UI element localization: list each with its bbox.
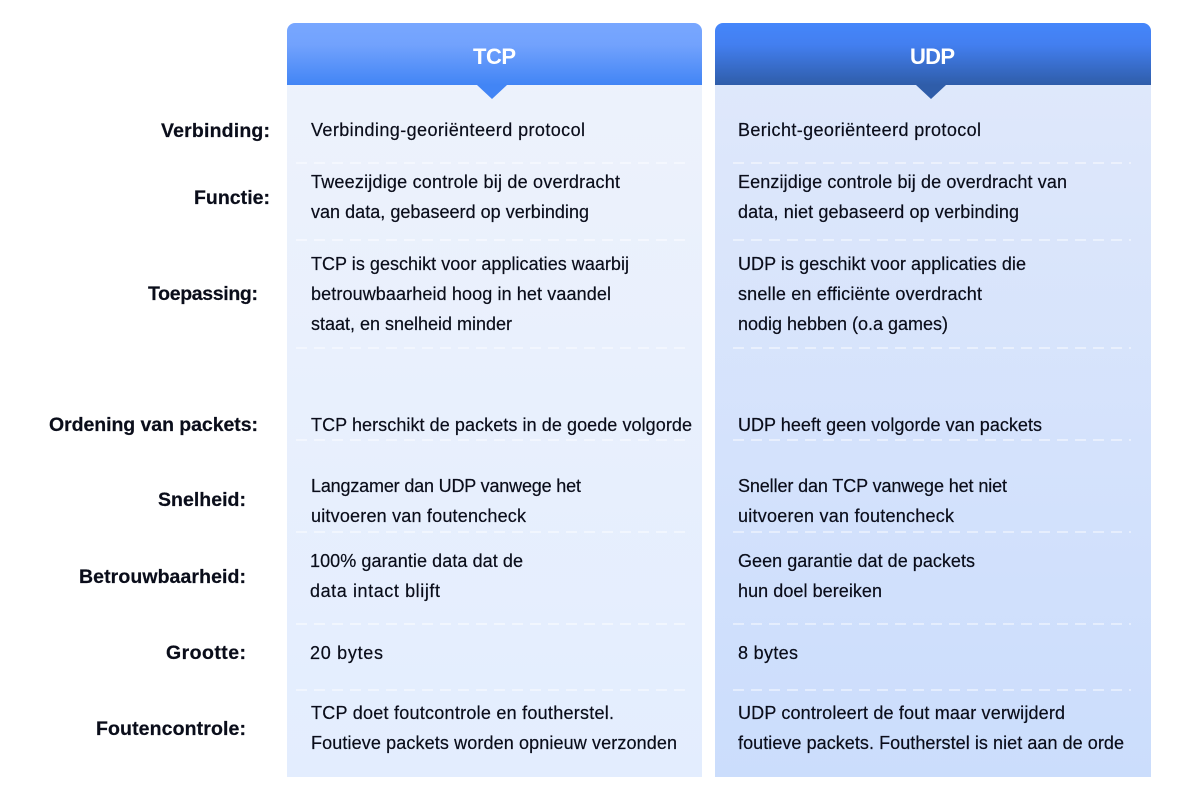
TCP cell: Betrouwbaarheid: data intact blijft [310,581,440,601]
UDP cell: Toepassing: snelle en efficiënte overdracht [738,284,982,304]
UDP cell: Foutencontrole [738,703,1124,753]
TCP cell: Functie: Tweezijdige controle bij de overdracht [311,172,620,192]
TCP cell: Foutencontrole: Foutieve packets worden opnieuw verzonden [311,733,677,753]
label: Snelheid: Snelheid: [158,489,246,511]
row labels [49,120,270,740]
UDP cell: Toepassing: UDP is geschikt voor applicaties die [738,254,1026,274]
UDP header band [715,23,1151,85]
UDP cell: Grootte: 8 bytes [738,643,798,663]
UDP cell: Betrouwbaarheid: Geen garantie dat de packets [738,551,975,571]
UDP cell: Toepassing [738,254,1026,334]
TCP cell: Snelheid [311,476,581,526]
TCP cell: Toepassing [311,254,629,334]
UDP cell: Betrouwbaarheid [738,551,975,601]
UDP cell: Verbinding: Bericht-georiënteerd protocol [738,120,981,140]
label: Verbinding: Verbinding: [161,120,270,142]
label: Foutencontrole: Foutencontrole: [96,718,246,740]
TCP cell: Ordening van packets: TCP herschikt de packets in de goede volgorde [311,415,692,435]
UDP cell: Functie: Eenzijdige controle bij de overdracht van [738,172,1067,192]
TCP cell: Betrouwbaarheid [310,551,523,601]
UDP cell: Functie [738,172,1067,222]
UDP heading: UDP [910,44,955,69]
panel: TCP column [287,23,702,777]
TCP cell: Foutencontrole: TCP doet foutcontrole en foutherstel. [311,703,614,723]
UDP cell: Functie: data, niet gebaseerd op verbinding [738,202,1019,222]
label: Ordening van packets: Ordening van packets: [49,414,258,436]
TCP cell: Snelheid: Langzamer dan UDP vanwege het [311,476,581,496]
TCP cell: Verbinding: Verbinding-georiënteerd protocol [311,120,585,140]
TCP cell: Functie: van data, gebaseerd op verbinding [311,202,589,222]
UDP cell: Snelheid: uitvoeren van foutencheck [738,506,955,526]
UDP cell: Snelheid: Sneller dan TCP vanwege het niet [738,476,1007,496]
UDP cell: Foutencontrole: foutieve packets. Foutherstel is niet aan de orde [738,733,1124,753]
UDP header pointer [916,85,946,99]
TCP cell: Betrouwbaarheid: 100% garantie data dat de [310,551,523,571]
TCP cell: Snelheid: uitvoeren van foutencheck [311,506,527,526]
UDP cell: Snelheid [738,476,1007,526]
label: Grootte: Grootte: [166,642,246,664]
label: Toepassing: Toepassing: [148,283,258,305]
TCP cell: Toepassing: betrouwbaarheid hoog in het vaandel [311,284,611,304]
UDP cell: Foutencontrole: UDP controleert de fout maar verwijderd [738,703,1065,723]
TCP cell: Toepassing: TCP is geschikt voor applicaties waarbij [311,254,629,274]
UDP cell: Betrouwbaarheid: hun doel bereiken [738,581,882,601]
TCP cell: Toepassing: staat, en snelheid minder [311,314,512,334]
TCP header pointer [477,85,507,99]
UDP cell: Toepassing: nodig hebben (o.a games) [738,314,948,334]
TCP panel body [287,60,702,777]
panel: UDP column [715,23,1151,777]
TCP cell: Foutencontrole [311,703,677,753]
TCP header band [287,23,702,85]
TCP cell: Functie [311,172,620,222]
TCP heading: TCP [473,44,516,69]
label: Betrouwbaarheid: Betrouwbaarheid: [79,566,246,588]
label: Functie: Functie: [194,187,270,209]
UDP cell: Ordening van packets: UDP heeft geen volgorde van packets [738,415,1042,435]
UDP panel body [715,60,1151,777]
TCP cell: Grootte: 20 bytes [310,643,383,663]
